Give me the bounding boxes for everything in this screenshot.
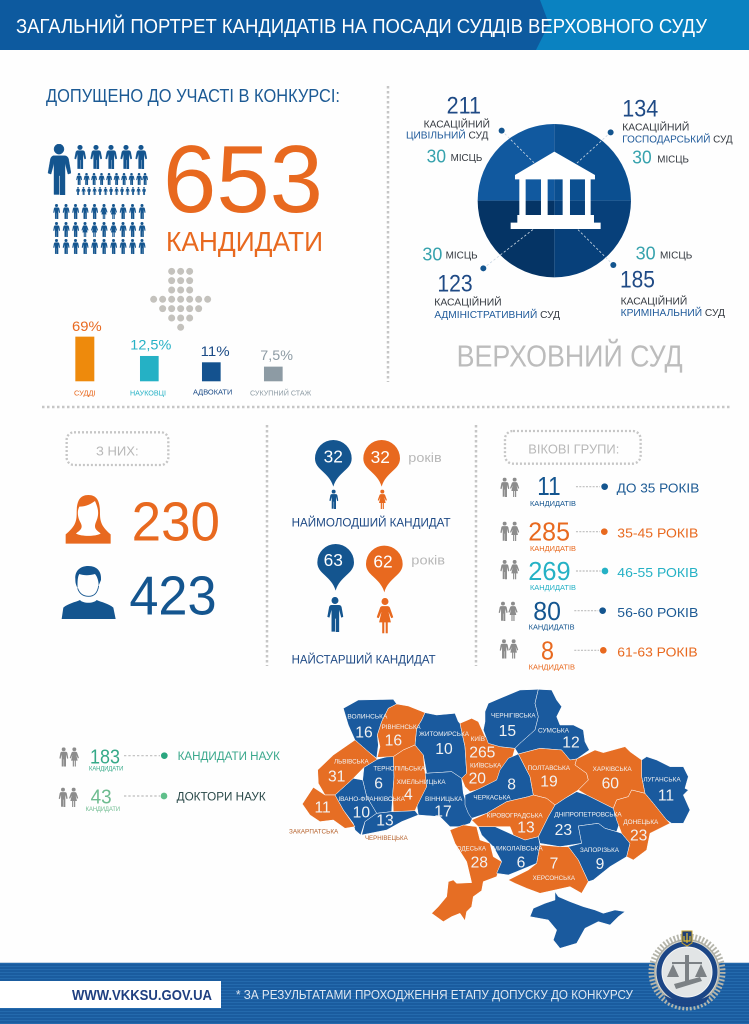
row: candidates of science: [59, 745, 281, 773]
map labels east: 12: [562, 734, 580, 751]
court stat: civil: МІСЦЬ: [451, 153, 483, 164]
map labels east: 11: [658, 787, 674, 804]
row: doctors of science: ДОКТОРИ НАУК: [177, 790, 266, 804]
court stat: administrative: МІСЦЬ: [446, 250, 478, 261]
court stat: civil: 211: [447, 92, 481, 119]
map labels west: 10: [435, 741, 453, 758]
map labels west: 16: [385, 733, 402, 750]
court stat: commercial: ГОСПОДАРСЬКИЙ СУД: [622, 132, 733, 145]
age row: 61-63: 8: [541, 635, 554, 665]
row: candidates of science: 183: [90, 745, 120, 768]
oldest candidates: 63: [324, 550, 343, 570]
row: doctors of science: КАНДИДАТИ: [86, 807, 120, 813]
oldest candidates: [292, 544, 445, 666]
map labels east: ДНІПРОПЕТРОВСЬКА: [554, 812, 622, 819]
oldest candidates: 62: [373, 551, 393, 571]
icon: woman bust: [66, 495, 111, 544]
age row: 56-60: [499, 596, 698, 631]
map labels east: 6: [517, 854, 526, 871]
youngest candidates: 32: [371, 447, 390, 467]
map labels west: 17: [434, 804, 452, 821]
age row: 46-55: 46-55 РОКІВ: [617, 565, 698, 580]
footer band: [0, 962, 749, 1024]
court stat: civil: 30: [427, 145, 446, 166]
youngest candidates: 32: [324, 446, 343, 466]
label box: age groups: ВІКОВІ ГРУПИ:: [528, 442, 619, 456]
bar chart: professions: 7,5%: [260, 347, 293, 363]
map labels east: ЛУГАНСЬКА: [643, 777, 681, 784]
map labels west: 20: [469, 770, 486, 787]
bar chart: professions: СУКУПНИЙ СТАЖ: [250, 388, 311, 397]
map labels east: [473, 712, 681, 882]
map labels east: ЗАПОРІЗЬКА: [580, 847, 620, 854]
court stat: administrative: 123: [437, 271, 473, 298]
age row: 61-63: 61-63 РОКІВ: [617, 644, 698, 659]
map labels east: 23: [555, 822, 572, 839]
court stat: criminal: 30: [636, 242, 656, 263]
court stat: criminal: МІСЦЬ: [660, 250, 693, 261]
big number 653: 653: [163, 126, 323, 233]
map labels east: 60: [602, 776, 619, 793]
court stat: civil: [406, 92, 490, 166]
map regions east: [465, 689, 690, 948]
age row: 61-63: КАНДИДАТІВ: [529, 662, 575, 671]
map labels west: КИЇВ: [471, 735, 486, 743]
age row: 56-60: 56-60 РОКІВ: [617, 605, 698, 620]
map labels east: 19: [540, 774, 558, 791]
bar chart: professions: НАУКОВЦІ: [130, 388, 166, 397]
number: women: 230: [132, 491, 220, 553]
age row: 35-45: 285: [528, 516, 570, 546]
court stat: commercial: 30: [632, 146, 652, 167]
map labels west: 16: [355, 724, 373, 741]
oldest candidates: років: [411, 552, 445, 567]
title: ЗАГАЛЬНИЙ ПОРТРЕТ КАНДИДАТІВ НА ПОСАДИ СУДДІВ ВЕРХОВНОГО СУДУ: [16, 14, 707, 38]
map labels east: 8: [507, 776, 516, 793]
court stat: commercial: [622, 96, 733, 167]
label box: age groups: [505, 431, 641, 464]
map labels east: МИКОЛАЇВСЬКА: [493, 845, 543, 853]
map labels east: ЧЕРКАСЬКА: [473, 794, 511, 801]
panel: age groups: [499, 431, 699, 671]
age row: 46-55: 269: [528, 556, 571, 586]
age row: 46-55: КАНДИДАТІВ: [530, 583, 576, 592]
map labels west: 265: [469, 745, 496, 762]
age row: 56-60: КАНДИДАТІВ: [529, 622, 575, 631]
age row: 35-45: 35-45 РОКІВ: [617, 526, 698, 541]
panel: academic degrees: [59, 745, 281, 813]
age row: 46-55: [500, 556, 698, 592]
map labels west: ІВАНО-ФРАНКІВСЬКА: [338, 796, 406, 803]
map of Ukraine: [289, 689, 690, 948]
map labels east: ХЕРСОНСЬКА: [533, 875, 576, 882]
oldest candidates: НАЙСТАРШИЙ КАНДИДАТ: [292, 651, 436, 666]
map labels east: 7: [550, 855, 558, 872]
map labels west: ЗАКАРПАТСЬКА: [289, 828, 339, 835]
court stat: civil: КАСАЦІЙНИЙ: [424, 117, 490, 130]
map labels west: ЛЬВІВСЬКА: [334, 759, 369, 766]
dividers: [42, 86, 731, 666]
heading: supreme court: ВЕРХОВНИЙ СУД: [457, 338, 683, 374]
bar chart: professions: 11%: [201, 343, 230, 359]
bar chart: professions: СУДДІ: [74, 388, 96, 397]
bar chart: professions: [72, 318, 311, 397]
map labels west: 31: [328, 769, 345, 786]
panel: supreme court: [406, 92, 733, 374]
icon: man bust: [62, 566, 116, 619]
map labels east: ПОЛТАВСЬКА: [528, 765, 571, 772]
map labels west: РІВНЕНСЬКА: [382, 724, 421, 731]
row: doctors of science: 43: [91, 785, 112, 808]
age row: up to 35: ДО 35 РОКІВ: [617, 481, 699, 496]
court stat: commercial: 134: [622, 96, 658, 123]
youngest candidates: НАЙМОЛОДШИЙ КАНДИДАТ: [292, 515, 451, 530]
header banner: [0, 0, 749, 50]
map labels west: 28: [471, 855, 488, 872]
court stat: civil: ЦИВІЛЬНИЙ СУД: [406, 129, 488, 142]
age row: up to 35: [500, 471, 699, 508]
map labels west: 10: [353, 804, 370, 821]
map labels west: ВОЛИНСЬКА: [347, 714, 388, 721]
age row: 35-45: КАНДИДАТІВ: [530, 544, 576, 553]
map labels east: ХАРКІВСЬКА: [593, 766, 632, 773]
panel: gender split: [62, 432, 220, 626]
map labels west: ХМЕЛЬНИЦЬКА: [397, 779, 446, 786]
chart: court circle: [478, 124, 631, 277]
map labels west: КИЇВСЬКА: [470, 761, 502, 769]
court stat: criminal: КАСАЦІЙНИЙ: [621, 294, 687, 307]
map labels east: ЧЕРНІГІВСЬКА: [491, 712, 536, 719]
icon: courthouse: [511, 152, 601, 229]
icon: crowd of people: [48, 144, 148, 254]
age row: 56-60: 80: [533, 596, 561, 626]
label box: of them: [67, 432, 168, 465]
court stat: commercial: МІСЦЬ: [657, 155, 689, 166]
map labels west: [289, 714, 502, 872]
bar chart: professions: 69%: [72, 318, 102, 334]
youngest candidates: [292, 440, 451, 530]
court stat: administrative: [422, 243, 560, 321]
court stat: administrative: КАСАЦІЙНИЙ: [434, 296, 502, 309]
map labels west: ОДЕСЬКА: [457, 846, 486, 853]
label box: of them: З НИХ:: [96, 445, 139, 459]
map labels west: ЖИТОМИРСЬКА: [419, 731, 470, 738]
age row: up to 35: КАНДИДАТІВ: [530, 499, 576, 508]
map labels east: 9: [596, 856, 604, 873]
court stat: administrative: 30: [422, 243, 442, 264]
number: men: 423: [129, 564, 217, 626]
youngest candidates: років: [408, 450, 442, 465]
court stat: criminal: КРИМІНАЛЬНИЙ СУД: [621, 306, 725, 319]
icon: dotted arrow: [150, 268, 211, 331]
row: candidates of science: КАНДИДАТИ: [89, 767, 123, 773]
website box: WWW.VKKSU.GOV.UA: [72, 987, 212, 1004]
footnote: * ЗА РЕЗУЛЬТАТАМИ ПРОХОДЖЕННЯ ЕТАПУ ДОПУСКУ ДО КОНКУРСУ: [236, 988, 633, 1002]
website box: [0, 981, 221, 1008]
label: candidates: КАНДИДАТИ: [166, 226, 323, 257]
court stat: criminal: 185: [620, 266, 655, 293]
row: candidates of science: КАНДИДАТИ НАУК: [178, 749, 281, 763]
map labels east: 15: [499, 723, 516, 740]
map labels east: 23: [630, 828, 648, 845]
map labels west: 4: [404, 786, 413, 803]
map labels east: ДОНЕЦЬКА: [623, 819, 659, 826]
icon: commission seal: [652, 931, 722, 1007]
map regions west: [302, 699, 515, 922]
heading: admitted: ДОПУЩЕНО ДО УЧАСТІ В КОНКУРСІ:: [46, 85, 340, 106]
map labels west: ТЕРНОПІЛЬСЬКА: [373, 766, 425, 773]
map labels east: СУМСЬКА: [538, 728, 570, 735]
age row: 35-45: [500, 516, 698, 553]
map labels east: КІРОВОГРАДСЬКА: [487, 812, 543, 819]
map labels west: ЧЕРНІВЕЦЬКА: [365, 835, 408, 842]
bar chart: professions: АДВОКАТИ: [193, 388, 232, 397]
row: doctors of science: [59, 785, 266, 813]
age row: 61-63: [500, 635, 698, 671]
panel: youngest and oldest: [292, 440, 451, 666]
court stat: commercial: КАСАЦІЙНИЙ: [622, 121, 689, 134]
age row: up to 35: 11: [537, 471, 561, 501]
map labels west: ВІННИЦЬКА: [425, 796, 463, 803]
map labels west: 13: [376, 813, 394, 830]
court stat: criminal: [620, 242, 725, 319]
bar chart: professions: 12,5%: [130, 336, 171, 352]
map labels west: 11: [315, 799, 331, 816]
map labels east: 13: [517, 819, 535, 836]
map labels west: 6: [374, 775, 383, 792]
court stat: administrative: АДМІНІСТРАТИВНИЙ СУД: [434, 308, 560, 321]
panel: admitted candidates: [46, 85, 340, 397]
